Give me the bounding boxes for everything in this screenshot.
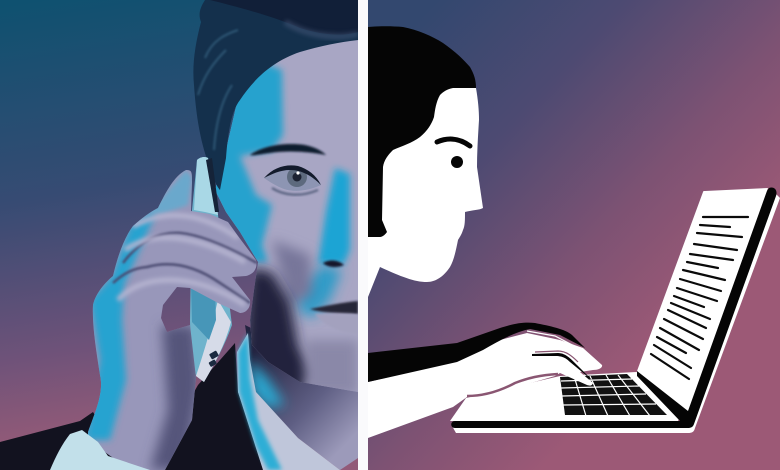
laptop screen <box>637 188 768 411</box>
pink creases <box>467 374 558 396</box>
mid cheek gradation <box>272 240 312 305</box>
left panel: photo of man on phone <box>0 0 360 470</box>
eye <box>264 165 321 195</box>
shadow on jaw <box>250 260 312 384</box>
center divider <box>358 0 368 470</box>
hair <box>193 0 358 190</box>
shirt collar <box>237 333 340 470</box>
laptop base <box>450 372 680 421</box>
cyan side light <box>208 62 283 262</box>
eyebrow <box>250 144 326 155</box>
white forearm and hand <box>368 333 602 438</box>
cyan light on hand <box>85 208 158 440</box>
arm and hand <box>368 323 602 438</box>
document lines on screen <box>651 217 748 379</box>
finger gap <box>532 353 593 381</box>
keyboard <box>560 374 667 416</box>
shadow lower palm <box>150 325 200 470</box>
hand <box>85 170 257 470</box>
face <box>208 30 358 395</box>
laptop lid bezel <box>451 187 777 428</box>
shirt cuff <box>50 430 150 470</box>
eye <box>451 156 463 168</box>
phone <box>190 157 232 382</box>
finger creases <box>133 215 238 238</box>
neck <box>240 320 360 470</box>
right panel: illustration of person on laptop <box>368 0 780 470</box>
head silhouette <box>368 26 483 297</box>
hair <box>368 26 476 237</box>
nose shadow <box>323 261 344 267</box>
jacket <box>0 343 265 470</box>
lips <box>310 300 358 318</box>
face <box>368 88 483 297</box>
left background gradient <box>0 0 358 470</box>
eyebrow <box>437 139 470 146</box>
black sleeve <box>368 323 585 382</box>
laptop <box>368 187 780 438</box>
right background gradient <box>368 0 780 470</box>
laptop white rim <box>452 190 780 433</box>
